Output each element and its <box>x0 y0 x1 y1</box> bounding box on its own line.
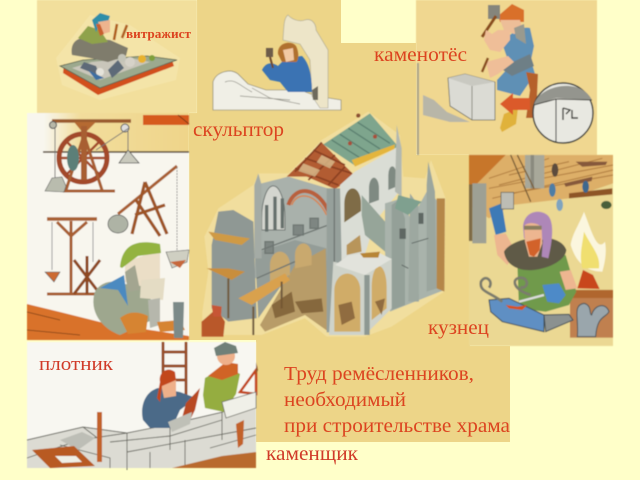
caption: Труд ремёсленников: Труд ремёсленников, <box>284 363 474 385</box>
caption: Труд ремёсленников: при строительстве храма <box>284 415 510 437</box>
label: каменщик: каменщик <box>266 443 358 465</box>
red roof <box>287 142 356 189</box>
panel: stained glass maker <box>37 0 197 113</box>
label: скульптор: скульптор <box>193 117 284 141</box>
label: каменотёс: каменотёс <box>374 44 467 66</box>
right gable walls <box>340 147 399 265</box>
label: плотник: плотник <box>39 354 114 375</box>
front transept arches <box>329 258 392 335</box>
right aisle piers <box>385 192 444 312</box>
green roof <box>323 113 398 166</box>
caption: Труд ремёсленников <box>284 363 510 437</box>
panel: sculptor figure <box>213 15 341 110</box>
panel: crane and carpenter <box>27 113 189 340</box>
caption: Труд ремёсленников: необходимый <box>284 389 406 411</box>
label: витражист: витражист <box>126 26 192 41</box>
panel: blacksmith <box>469 155 613 346</box>
panel: tan backdrop <box>189 0 510 442</box>
panel: masons <box>27 342 258 470</box>
panel: stonemason <box>416 0 597 155</box>
illustration: cathedral cutaway <box>202 112 446 337</box>
cathedral halo <box>202 112 446 337</box>
central pier <box>327 188 342 332</box>
label: кузнец: кузнец <box>428 317 489 339</box>
scaffolds <box>208 232 250 245</box>
left nave walls <box>255 177 333 278</box>
